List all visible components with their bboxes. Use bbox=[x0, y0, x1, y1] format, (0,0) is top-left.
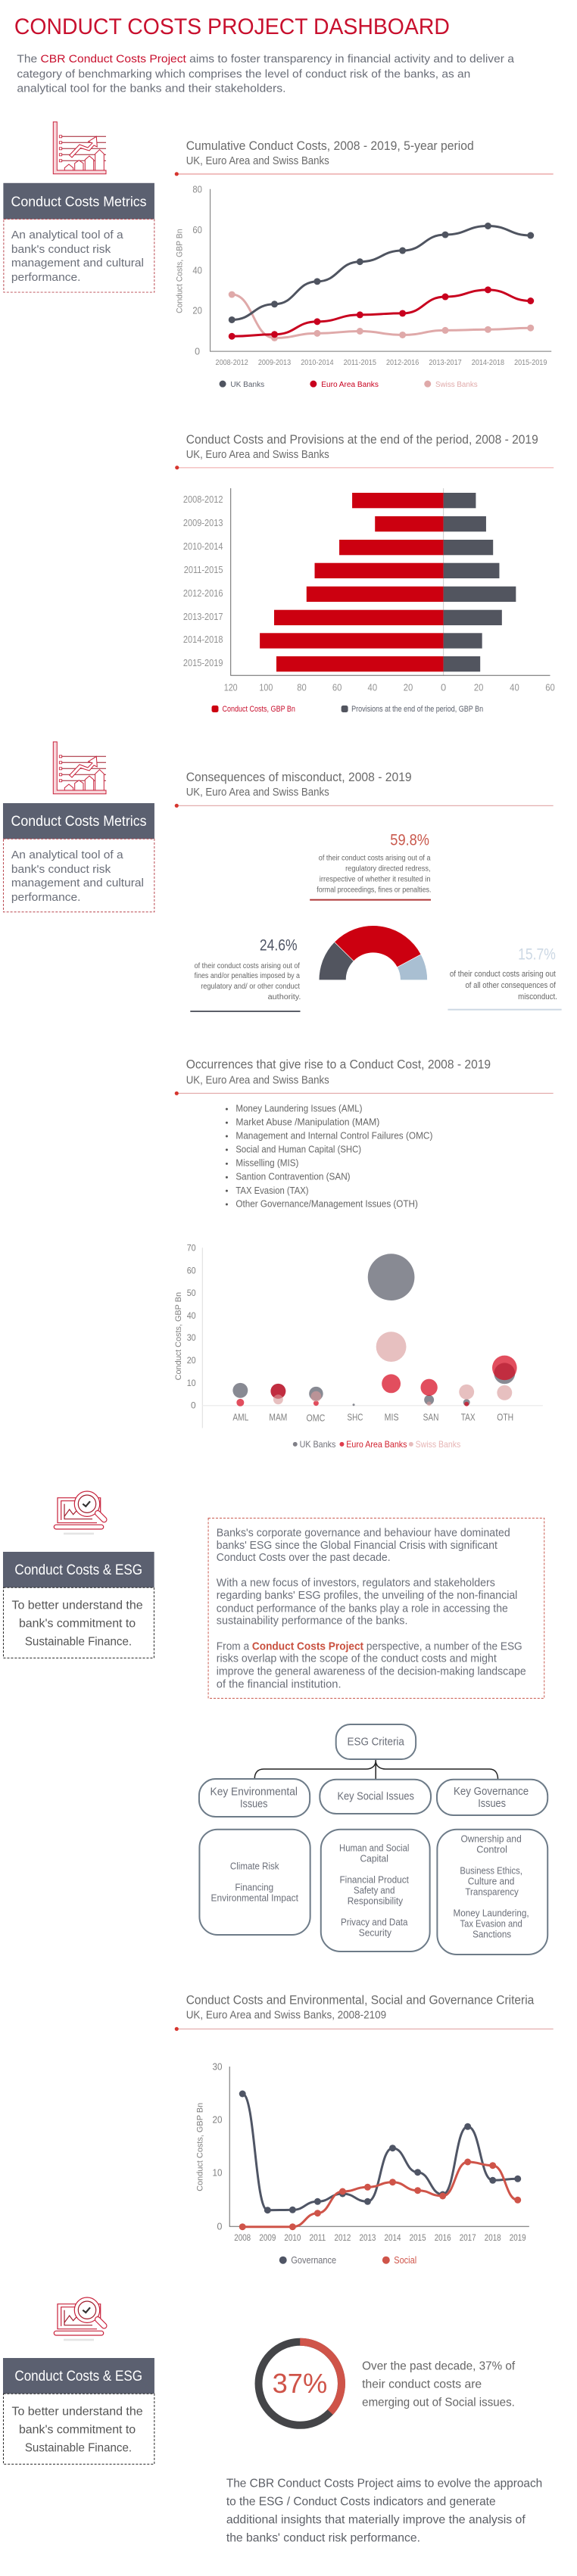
text block: ESG context: regarding banks' ESG profiles, the unveiling of the non-financial bbox=[217, 1590, 517, 1602]
box: environmental issues: Climate Risk bbox=[230, 1861, 279, 1871]
text block: closing statement: additional insights that materially improve the analysis of bbox=[226, 2513, 526, 2526]
chart legend bbox=[212, 705, 483, 714]
box: environmental issues: Environmental Impact bbox=[211, 1892, 298, 1903]
bar chart: conduct costs and provisions: 80 bbox=[297, 681, 307, 693]
diagram: ESG criteria tree bbox=[199, 1724, 547, 1955]
intro text: analytical tool for the banks and their stakeholders. bbox=[17, 82, 286, 95]
series: Swiss banks bbox=[229, 291, 534, 341]
callout: 15.7 percent: misconduct. bbox=[518, 992, 557, 1001]
callout: 15.7 percent: 15.7% bbox=[518, 945, 556, 963]
line chart: governance and social: 2015 bbox=[410, 2234, 426, 2243]
line chart: governance and social: 2009 bbox=[259, 2234, 276, 2243]
panel: conduct costs and ESG 2 bbox=[3, 2358, 154, 2464]
bubble chart: occurrences: MAM bbox=[269, 1413, 287, 1423]
bar chart: conduct costs and provisions: 2015-2019 bbox=[183, 658, 223, 668]
text block: ESG context: of the financial institution. bbox=[217, 1678, 342, 1690]
panel: conduct costs metrics 2 bbox=[3, 803, 154, 912]
box: governance issues: Money Laundering, bbox=[454, 1908, 529, 1918]
chart legend bbox=[279, 2254, 416, 2266]
list of occurrence categories: Misselling (MIS) bbox=[235, 1157, 298, 1169]
box: governance issues: Business Ethics, bbox=[460, 1865, 522, 1876]
bar chart: conduct costs and provisions: 60 bbox=[545, 681, 555, 693]
line chart: cumulative conduct costs bbox=[176, 185, 551, 389]
bar chart: conduct costs and provisions: 2011-2015 bbox=[184, 565, 223, 575]
text block: ESG context: With a new focus of investors, regulators and stakeholders bbox=[217, 1577, 495, 1589]
icon: chart with arrow bbox=[53, 122, 106, 174]
bubble chart: occurrences: OTH bbox=[497, 1413, 513, 1423]
panel header: Conduct Costs & ESG bbox=[14, 2369, 142, 2384]
panel description: An analytical tool of a bbox=[11, 849, 123, 861]
box: environmental issues: Financing bbox=[235, 1882, 273, 1892]
node: key governance issues: Issues bbox=[478, 1797, 506, 1810]
panel header bbox=[3, 1552, 154, 1587]
line chart: governance and social: 2017 bbox=[460, 2234, 476, 2243]
node: ESG criteria bbox=[336, 1724, 416, 1759]
chart legend: Euro Area Banks bbox=[321, 381, 379, 389]
chart legend bbox=[220, 381, 478, 389]
chart legend: Provisions at the end of the period, GBP Bn bbox=[351, 705, 483, 714]
list of occurrence categories bbox=[226, 1103, 432, 1210]
line chart: cumulative conduct costs: 0 bbox=[195, 347, 200, 357]
panel description bbox=[4, 220, 154, 292]
panel header bbox=[3, 2358, 154, 2394]
text block: ESG context: banks' ESG since the Global Financial Crisis with significant bbox=[217, 1540, 497, 1552]
bar chart: conduct costs and provisions: 2008-2012 bbox=[183, 494, 223, 505]
connector lines bbox=[254, 1759, 498, 1780]
callout: 15.7 percent bbox=[448, 945, 562, 1011]
chart legend: Swiss Banks bbox=[416, 1439, 460, 1450]
panel description bbox=[3, 1587, 154, 1658]
heading: occurrences bbox=[175, 1057, 554, 1095]
line chart: cumulative conduct costs: 80 bbox=[192, 185, 202, 195]
bubble chart: occurrences: 0 bbox=[191, 1400, 196, 1411]
panel description: bank's conduct risk bbox=[11, 243, 111, 256]
box: governance issues: Tax Evasion and bbox=[460, 1918, 522, 1929]
bubble chart: occurrences: 60 bbox=[187, 1266, 196, 1276]
heading: cumulative conduct costs: Cumulative Conduct Costs, 2008 - 2019, 5-year period bbox=[186, 139, 474, 153]
list of occurrence categories: Other Governance/Management Issues (OTH) bbox=[235, 1198, 418, 1210]
line chart: cumulative conduct costs: 2010-2014 bbox=[301, 359, 334, 367]
intro text: The CBR Conduct Costs Project aims to foster transparency in financial activity and to deliver a bbox=[17, 53, 515, 66]
panel description: bank's commitment to bbox=[19, 2424, 136, 2437]
panel description: An analytical tool of a bbox=[11, 229, 123, 241]
callout: 24.6 percent bbox=[190, 937, 301, 1012]
series: governance bbox=[239, 2091, 521, 2213]
heading: conduct costs and ESG criteria: UK, Euro Area and Swiss Banks, 2008-2109 bbox=[186, 2010, 386, 2022]
heading: cumulative conduct costs: UK, Euro Area and Swiss Banks bbox=[186, 155, 329, 167]
line chart: governance and social: 2013 bbox=[360, 2234, 376, 2243]
panel description bbox=[3, 839, 154, 912]
text block: ESG context: risks overlap with the scope of the conduct costs and might bbox=[217, 1652, 497, 1665]
line chart: governance and social: 2014 bbox=[385, 2234, 401, 2243]
list of occurrence categories: Social and Human Capital (SHC) bbox=[235, 1143, 361, 1154]
bars: provisions bbox=[444, 493, 516, 671]
bubble chart: occurrences: TAX bbox=[461, 1413, 476, 1423]
chart legend: UK Banks bbox=[230, 381, 264, 389]
heading: consequences of misconduct bbox=[175, 770, 554, 808]
node: key environmental issues: Issues bbox=[240, 1798, 267, 1811]
bubble chart: occurrences: 70 bbox=[187, 1243, 196, 1254]
text block: social issues share: their conduct costs are bbox=[362, 2378, 482, 2391]
bar chart: conduct costs and provisions: 20 bbox=[404, 681, 413, 693]
bubbles: UK banks bbox=[232, 1254, 515, 1406]
intro text bbox=[17, 53, 515, 95]
list of occurrence categories: Money Laundering Issues (AML) bbox=[235, 1103, 362, 1114]
text block: ESG context: Conduct Costs over the past decade. bbox=[217, 1552, 391, 1564]
line chart: cumulative conduct costs: 2013-2017 bbox=[429, 359, 462, 367]
box: social issues: Privacy and Data bbox=[341, 1917, 408, 1927]
callout: 59.8 percent: of their conduct costs arising out of a bbox=[319, 855, 431, 863]
text block: ESG context: From a Conduct Costs Project perspective, a number of the ESG bbox=[217, 1640, 522, 1652]
box: social issues: Human and Social bbox=[339, 1842, 409, 1853]
panel header: Conduct Costs Metrics bbox=[11, 195, 147, 210]
text block: closing statement: to the ESG / Conduct Costs indicators and generate bbox=[226, 2495, 496, 2508]
series: Euro area banks bbox=[229, 286, 534, 340]
line chart: governance and social: 2018 bbox=[485, 2234, 501, 2243]
callout: 24.6 percent: regulatory and/ or other conduct bbox=[201, 983, 300, 991]
text block: ESG context bbox=[208, 1519, 544, 1699]
line chart: cumulative conduct costs: 20 bbox=[192, 305, 202, 316]
line chart: governance and social: 2012 bbox=[334, 2234, 351, 2243]
panel: conduct costs and ESG 1 bbox=[3, 1552, 154, 1658]
callout: 24.6 percent: fines and/or penalties imposed by a bbox=[195, 972, 300, 980]
node: key environmental issues: Key Environmental bbox=[211, 1786, 298, 1799]
line chart: cumulative conduct costs: 2012-2016 bbox=[386, 359, 419, 367]
panel header bbox=[3, 183, 154, 220]
box: governance issues: Transparency bbox=[465, 1886, 519, 1897]
node: key environmental issues bbox=[199, 1779, 310, 1817]
line chart: governance and social: 10 bbox=[213, 2167, 223, 2179]
box: social issues: Capital bbox=[360, 1853, 388, 1864]
box: governance issues: Culture and bbox=[468, 1876, 515, 1886]
box: governance issues: Ownership and bbox=[461, 1833, 522, 1844]
donut chart: 37 percent social: 37% bbox=[273, 2369, 327, 2399]
donut chart: 37 percent social bbox=[259, 2342, 342, 2425]
heading: consequences of misconduct: UK, Euro Area and Swiss Banks bbox=[186, 787, 329, 799]
line chart: governance and social: 2010 bbox=[284, 2234, 301, 2243]
node: key governance issues: Key Governance bbox=[454, 1785, 529, 1798]
box: governance issues: Sanctions bbox=[473, 1929, 511, 1939]
panel: conduct costs metrics 1 bbox=[3, 183, 154, 292]
bubble chart: occurrences: SAN bbox=[423, 1413, 438, 1423]
panel description: performance. bbox=[11, 271, 80, 284]
panel description: bank's conduct risk bbox=[11, 863, 111, 876]
bubble chart: occurrences: MIS bbox=[385, 1413, 399, 1423]
callout: 24.6 percent: of their conduct costs arising out of bbox=[195, 962, 300, 970]
line chart: cumulative conduct costs: 2011-2015 bbox=[344, 359, 376, 367]
bar chart: conduct costs and provisions: 40 bbox=[510, 681, 519, 693]
text block: social issues share bbox=[362, 2360, 516, 2409]
box: environmental issues bbox=[199, 1830, 310, 1935]
node: ESG criteria: ESG Criteria bbox=[348, 1736, 404, 1749]
bubbles: Swiss banks bbox=[273, 1332, 512, 1406]
bars: conduct costs bbox=[260, 493, 444, 671]
intro text: category of benchmarking which comprises the level of conduct risk of the banks, as an bbox=[17, 67, 470, 80]
node: key social issues: Key Social Issues bbox=[337, 1789, 414, 1802]
bar chart: conduct costs and provisions: 2014-2018 bbox=[183, 634, 223, 645]
line chart: governance and social: 30 bbox=[213, 2061, 223, 2073]
heading: occurrences: Occurrences that give rise to a Conduct Cost, 2008 - 2019 bbox=[186, 1057, 491, 1072]
box: social issues bbox=[321, 1830, 430, 1951]
node: key governance issues bbox=[437, 1780, 547, 1815]
heading: conduct costs and ESG criteria: Conduct Costs and Environmental, Social and Governance Criteria bbox=[186, 1993, 535, 2008]
icon: laptop with magnifier bbox=[54, 1491, 104, 1534]
panel header: Conduct Costs Metrics bbox=[11, 814, 147, 830]
series: social bbox=[239, 2159, 521, 2230]
list of occurrence categories: Market Abuse /Manipulation (MAM) bbox=[235, 1117, 379, 1128]
panel header bbox=[3, 803, 154, 839]
chart legend: Conduct Costs, GBP Bn bbox=[222, 705, 295, 714]
chart legend: UK Banks bbox=[300, 1439, 335, 1450]
line chart: cumulative conduct costs: 60 bbox=[192, 225, 202, 235]
callout: 59.8 percent: irrespective of whether it resulted in bbox=[320, 876, 431, 884]
line chart: governance and social: 2008 bbox=[234, 2234, 251, 2243]
line chart: governance and social: 0 bbox=[217, 2221, 223, 2232]
bar chart: conduct costs and provisions: 2013-2017 bbox=[183, 612, 223, 622]
text block: closing statement: the banks' conduct risk performance. bbox=[226, 2531, 420, 2544]
line chart: governance and social: 2016 bbox=[435, 2234, 451, 2243]
line chart: cumulative conduct costs: 2015-2019 bbox=[514, 359, 547, 367]
series: UK banks bbox=[229, 223, 534, 323]
bubble chart: occurrences: 50 bbox=[187, 1288, 196, 1298]
callout: 15.7 percent: of their conduct costs arising out bbox=[450, 970, 556, 979]
bar chart: conduct costs and provisions: 100 bbox=[259, 681, 273, 693]
callout: 15.7 percent: of all other consequences of bbox=[465, 981, 557, 990]
heading: conduct costs and provisions: UK, Euro Area and Swiss Banks bbox=[186, 449, 329, 461]
bar chart: conduct costs and provisions bbox=[183, 488, 555, 714]
line chart: cumulative conduct costs: Conduct Costs, GBP Bn bbox=[176, 229, 185, 313]
text block: ESG context: sustainability performance of the banks. bbox=[217, 1615, 407, 1627]
panel description: management and cultural bbox=[11, 877, 144, 889]
node: key social issues bbox=[320, 1780, 431, 1814]
gauge chart: consequences split bbox=[319, 926, 427, 980]
chart legend: Euro Area Banks bbox=[346, 1439, 407, 1450]
line chart: cumulative conduct costs: 2014-2018 bbox=[472, 359, 504, 367]
bar chart: conduct costs and provisions: 120 bbox=[224, 681, 238, 693]
bubble chart: occurrences bbox=[174, 1243, 543, 1450]
box: governance issues bbox=[437, 1830, 547, 1955]
panel description: performance. bbox=[11, 891, 80, 904]
line chart: cumulative conduct costs: 40 bbox=[192, 266, 202, 276]
bar chart: conduct costs and provisions: 0 bbox=[441, 681, 446, 693]
heading: occurrences: UK, Euro Area and Swiss Banks bbox=[186, 1074, 329, 1086]
text block: ESG context: Banks's corporate governance and behaviour have dominated bbox=[217, 1527, 510, 1539]
bubble chart: occurrences: OMC bbox=[306, 1413, 325, 1424]
bubble chart: occurrences: 30 bbox=[187, 1332, 196, 1343]
callout: 59.8 percent: 59.8% bbox=[390, 832, 429, 849]
list of occurrence categories: Management and Internal Control Failures (OMC) bbox=[235, 1129, 432, 1141]
text block: social issues share: emerging out of Social issues. bbox=[362, 2396, 515, 2409]
callout: 59.8 percent bbox=[310, 832, 432, 901]
text block: social issues share: Over the past decade, 37% of bbox=[362, 2360, 516, 2372]
heading: consequences of misconduct: Consequences of misconduct, 2008 - 2019 bbox=[186, 770, 412, 784]
panel description: Sustainable Finance. bbox=[25, 2442, 132, 2455]
line chart: governance and social: Conduct Costs, GBP Bn bbox=[196, 2103, 205, 2191]
bubble chart: occurrences: 10 bbox=[187, 1378, 196, 1388]
panel header: Conduct Costs & ESG bbox=[14, 1562, 142, 1578]
bar chart: conduct costs and provisions: 2009-2013 bbox=[183, 518, 223, 528]
heading: conduct costs and provisions: Conduct Costs and Provisions at the end of the period, 2008 - 2019 bbox=[186, 432, 538, 447]
line chart: governance and social bbox=[196, 2061, 529, 2266]
box: social issues: Security bbox=[359, 1927, 392, 1938]
callout: 59.8 percent: regulatory directed redress, bbox=[345, 865, 431, 874]
bubble chart: occurrences: Conduct Costs, GBP Bn bbox=[174, 1292, 183, 1380]
icon: chart with arrow bbox=[53, 742, 106, 794]
callout: 59.8 percent: formal proceedings, fines or penalties. bbox=[317, 886, 432, 895]
panel description: To better understand the bbox=[12, 1599, 143, 1612]
icon: laptop with magnifier bbox=[54, 2297, 104, 2341]
line chart: governance and social: 2011 bbox=[309, 2234, 326, 2243]
panel description: To better understand the bbox=[12, 2406, 143, 2419]
bar chart: conduct costs and provisions: 20 bbox=[474, 681, 483, 693]
bubble chart: occurrences: SHC bbox=[348, 1413, 363, 1423]
panel description: management and cultural bbox=[11, 257, 144, 269]
bubble chart: occurrences: 20 bbox=[187, 1355, 196, 1366]
heading: conduct costs and ESG criteria bbox=[175, 1993, 554, 2031]
heading: cumulative conduct costs bbox=[175, 139, 554, 176]
line chart: cumulative conduct costs: 2008-2012 bbox=[216, 359, 248, 367]
list of occurrence categories: TAX Evasion (TAX) bbox=[235, 1185, 309, 1196]
line chart: governance and social: 2019 bbox=[510, 2234, 526, 2243]
bubble chart: occurrences: 40 bbox=[187, 1310, 196, 1321]
chart legend: Social bbox=[394, 2254, 416, 2266]
chart legend bbox=[293, 1439, 460, 1450]
chart legend: Governance bbox=[291, 2254, 336, 2266]
panel description: Sustainable Finance. bbox=[25, 1636, 132, 1649]
panel description bbox=[3, 2394, 154, 2464]
panel description: bank's commitment to bbox=[19, 1618, 136, 1631]
box: social issues: Safety and bbox=[354, 1885, 395, 1895]
text block: ESG context: conduct performance of the banks play a role in accessing the bbox=[217, 1603, 508, 1615]
line chart: cumulative conduct costs: 2009-2013 bbox=[258, 359, 291, 367]
chart legend: Swiss Banks bbox=[435, 381, 478, 389]
bar chart: conduct costs and provisions: 2012-2016 bbox=[183, 588, 223, 599]
bar chart: conduct costs and provisions: 60 bbox=[332, 681, 342, 693]
box: social issues: Responsibility bbox=[348, 1895, 404, 1906]
text block: closing statement: The CBR Conduct Costs Project aims to evolve the approach bbox=[226, 2477, 542, 2490]
heading: conduct costs and provisions bbox=[175, 432, 554, 469]
box: governance issues: Control bbox=[476, 1844, 507, 1855]
line chart: governance and social: 20 bbox=[213, 2114, 223, 2126]
list of occurrence categories: Santion Contravention (SAN) bbox=[235, 1171, 351, 1182]
box: social issues: Financial Product bbox=[339, 1874, 409, 1885]
bar chart: conduct costs and provisions: 2010-2014 bbox=[183, 541, 223, 552]
bubble chart: occurrences: AML bbox=[232, 1413, 248, 1423]
bubbles: Euro area banks bbox=[236, 1356, 517, 1406]
text block: ESG context: improve the general awareness of the decision-making landscape bbox=[217, 1665, 526, 1677]
title: CONDUCT COSTS PROJECT DASHBOARD bbox=[14, 14, 450, 39]
callout: 24.6 percent: authority. bbox=[268, 993, 301, 1001]
callout: 24.6 percent: 24.6% bbox=[260, 937, 298, 955]
text block: closing statement bbox=[226, 2477, 542, 2544]
bar chart: conduct costs and provisions: 40 bbox=[368, 681, 377, 693]
